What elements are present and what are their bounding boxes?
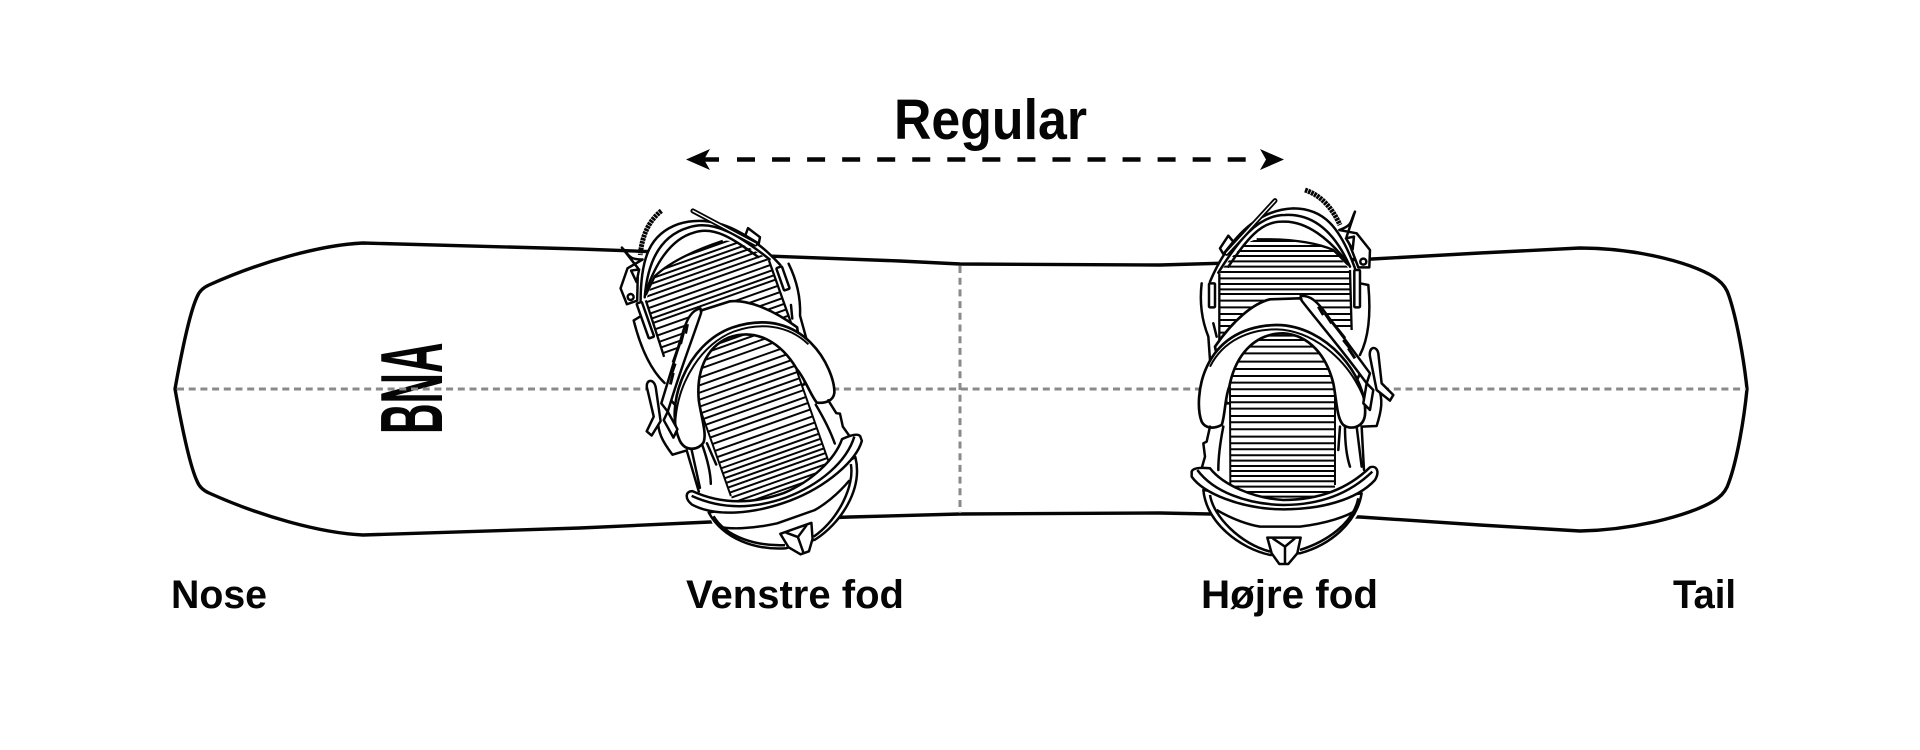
snowboard outline (175, 243, 1747, 535)
diagram: snowboard stance (173, 98, 1749, 616)
ratchet strap (1301, 296, 1393, 410)
label: nose: Nose (171, 573, 267, 617)
serrated strap end (1305, 190, 1340, 225)
label: left foot: Venstre fod (686, 573, 904, 617)
label: right foot: Højre fod (1201, 573, 1378, 617)
board logo: BNA (363, 342, 461, 434)
ankle strap (1215, 298, 1360, 403)
side frames (1201, 283, 1381, 470)
toe hoop and strap (1210, 201, 1355, 282)
label: tail: Tail (1673, 573, 1736, 617)
stance arrow (686, 149, 1284, 170)
heel tip (1267, 538, 1301, 564)
centre lines (177, 266, 1746, 513)
binding: left foot (579, 173, 891, 589)
title: Regular (894, 88, 1087, 152)
binding silhouette (1192, 208, 1382, 564)
ankle pad (1199, 325, 1365, 428)
heel cup (1192, 467, 1377, 555)
binding: right foot (1192, 190, 1393, 564)
toe buckle (1209, 212, 1370, 307)
